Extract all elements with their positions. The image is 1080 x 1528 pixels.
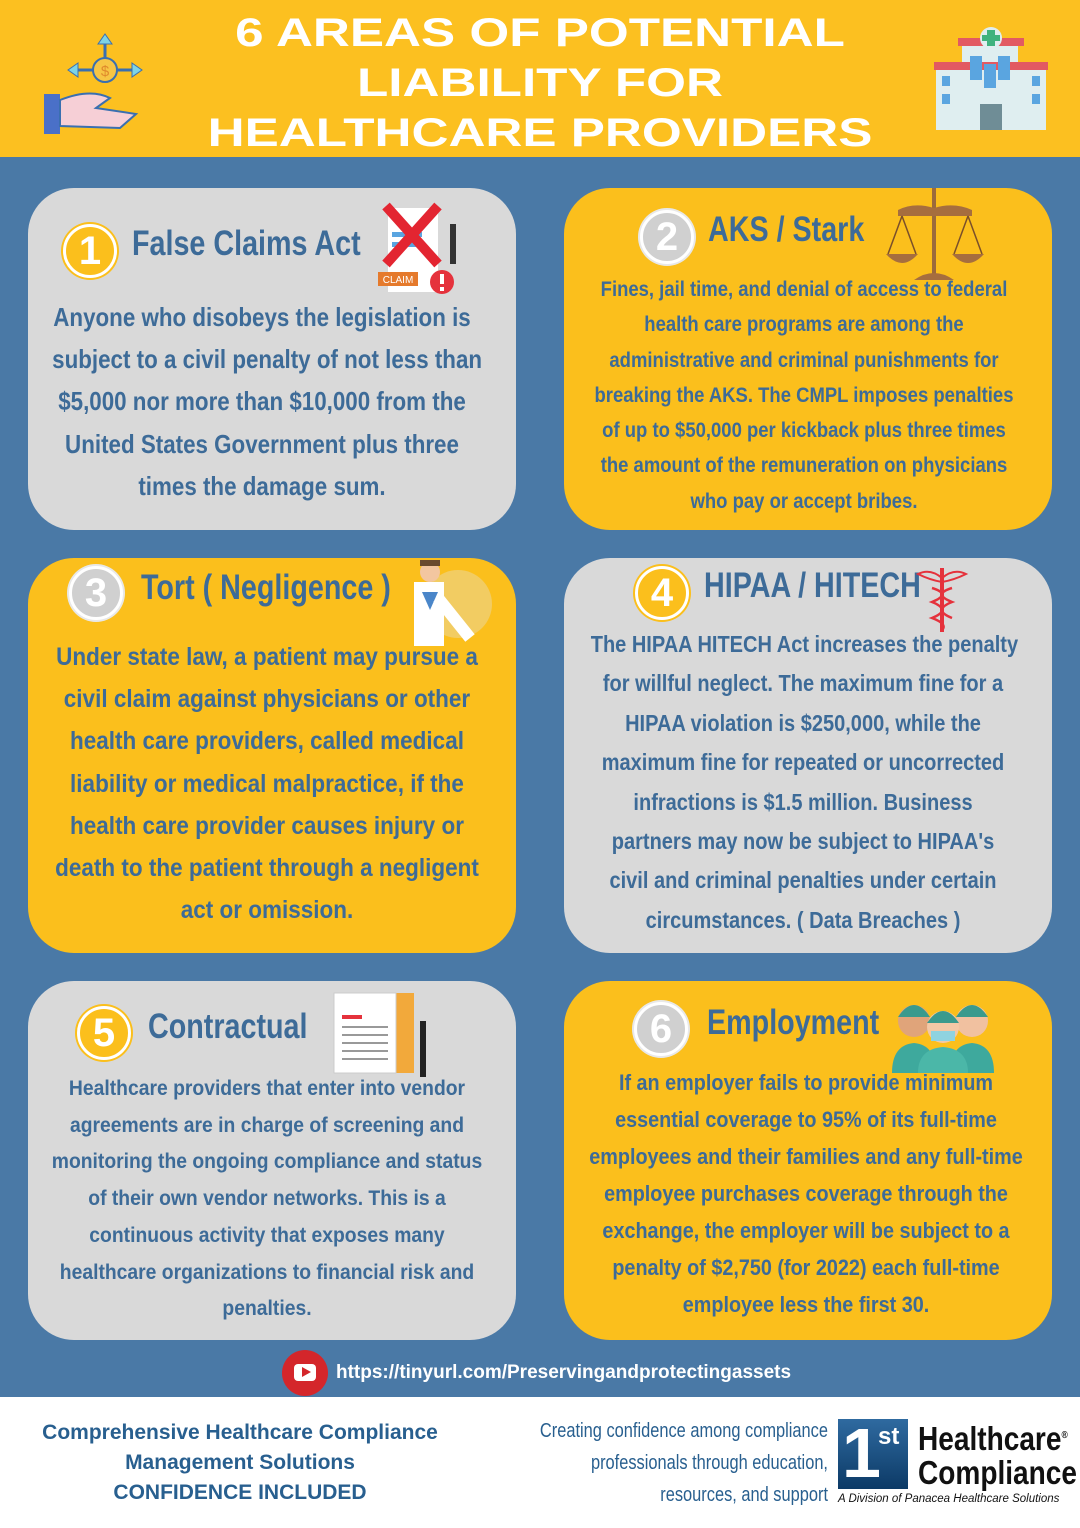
body text 3: death to the patient through a negligent — [55, 854, 479, 882]
body text 6: essential coverage to 95% of its full-time — [615, 1107, 997, 1132]
body text 4: The HIPAA HITECH Act increases the penalty — [591, 631, 1018, 657]
title: HEALTHCARE PROVIDERS — [208, 111, 872, 155]
body text 5: Healthcare providers that enter into vendor — [69, 1077, 465, 1100]
body text 2: Fines, jail time, and denial of access to federal — [601, 278, 1007, 301]
footer tagline — [540, 1420, 828, 1506]
heading 5: Contractual — [148, 1007, 307, 1046]
body text 3: civil claim against physicians or other — [64, 685, 470, 713]
title — [208, 11, 872, 155]
heading 6: Employment — [707, 1003, 879, 1042]
body text 6 — [589, 1070, 1023, 1317]
icon: hand with dollar: $ — [101, 63, 110, 80]
number badge 6 — [634, 1002, 688, 1056]
number badge 4: 4 — [651, 570, 673, 614]
number badge 4 — [635, 566, 689, 620]
icon: medical team — [892, 1005, 994, 1073]
body text 3: liability or medical malpractice, if the — [70, 770, 464, 798]
body text 6: exchange, the employer will be subject to a — [602, 1218, 1010, 1243]
body text 3 — [55, 643, 479, 924]
icon: doctor — [414, 560, 492, 646]
body text 1: times the damage sum. — [138, 471, 386, 501]
heading 1: False Claims Act — [132, 224, 361, 263]
panel: 3 Tort (Negligence) — [28, 558, 516, 953]
header band — [0, 0, 1080, 157]
body text 2: administrative and criminal punishments for — [609, 349, 999, 372]
logo: 1st Healthcare Compliance: st — [878, 1423, 899, 1450]
icon: hospital — [934, 27, 1048, 130]
footer tagline: professionals through education, — [591, 1452, 828, 1474]
body text 4: for willful neglect. The maximum fine for a — [603, 670, 1003, 696]
heading 2: AKS / Stark — [708, 210, 864, 249]
icon: document — [334, 992, 426, 1077]
logo: 1st Healthcare Compliance: Compliance — [918, 1454, 1077, 1491]
footer tagline: Creating confidence among compliance — [540, 1420, 828, 1442]
footer left text: CONFIDENCE INCLUDED — [113, 1481, 367, 1504]
body text 3: health care provider causes injury or — [70, 812, 464, 840]
link row with youtube icon — [282, 1350, 791, 1396]
number badge 5 — [77, 1006, 131, 1060]
body text 6: penalty of $2,750 (for 2022) each full-time — [612, 1255, 1000, 1280]
panel: 1 False Claims Act — [28, 188, 516, 530]
panel: 4 HIPAA / HITECH — [564, 558, 1052, 953]
body text 5: healthcare organizations to financial risk and — [60, 1261, 474, 1284]
body text 2: the amount of the remuneration on physicians — [601, 454, 1007, 477]
title: LIABILITY FOR — [357, 61, 723, 105]
icon: hand with dollar — [44, 33, 143, 134]
body text 4 — [590, 631, 1018, 933]
body text 2: of up to $50,000 per kickback plus three times — [602, 419, 1006, 442]
body text 5: agreements are in charge of screening and — [70, 1114, 464, 1137]
body text 4: maximum fine for repeated or uncorrected — [602, 749, 1004, 775]
body text 6: employee less the first 30. — [683, 1292, 929, 1317]
body text 1 — [52, 302, 482, 501]
number badge 6: 6 — [650, 1006, 672, 1050]
logo: 1st Healthcare Compliance — [838, 1414, 1077, 1505]
number badge 2: 2 — [656, 214, 678, 258]
body text 2: health care programs are among the — [644, 313, 964, 336]
body text 3: act or omission. — [181, 896, 353, 924]
body text 5: continuous activity that exposes many — [89, 1224, 445, 1247]
body text 4: infractions is $1.5 million. Business — [633, 789, 973, 815]
footer tagline: resources, and support — [660, 1484, 828, 1506]
number badge 3: 3 — [85, 570, 107, 614]
icon: claim form with X: CLAIM — [383, 275, 413, 286]
logo: 1st Healthcare Compliance: A Division of Panacea Healthcare Solutions — [838, 1493, 1059, 1505]
body text 1: United States Government plus three — [65, 429, 459, 459]
body text 2: breaking the AKS. The CMPL imposes penalties — [595, 384, 1013, 407]
icon: youtube — [282, 1350, 328, 1396]
link text: https://tinyurl.com/Preservingandprotectingassets — [336, 1362, 791, 1383]
number badge 1: 1 — [79, 228, 101, 272]
body text 5: of their own vendor networks. This is a — [88, 1187, 446, 1210]
body text 1: subject to a civil penalty of not less than — [52, 344, 482, 374]
body text 1: $5,000 nor more than $10,000 from the — [58, 386, 466, 416]
body text 4: circumstances. ( Data Breaches ) — [646, 907, 960, 933]
logo: 1st Healthcare Compliance: 1 — [842, 1414, 881, 1492]
body text 3: Under state law, a patient may pursue a — [56, 643, 478, 671]
footer — [0, 1397, 1080, 1528]
body text 5: monitoring the ongoing compliance and status — [52, 1150, 482, 1173]
heading 3: Tort ( Negligence ) — [141, 568, 391, 607]
footer left text: Management Solutions — [125, 1451, 355, 1474]
footer left text: Comprehensive Healthcare Compliance — [42, 1421, 438, 1444]
body text 4: HIPAA violation is $250,000, while the — [625, 710, 981, 736]
number badge 5: 5 — [93, 1010, 115, 1054]
body text 5 — [52, 1077, 482, 1320]
body text 4: partners may now be subject to HIPAA's — [612, 828, 994, 854]
body text 2: who pay or accept bribes. — [691, 490, 917, 513]
icon: caduceus — [916, 568, 968, 632]
body text 3: health care providers, called medical — [70, 727, 464, 755]
body text 6: If an employer fails to provide minimum — [619, 1070, 993, 1095]
number badge 2 — [640, 210, 694, 264]
body text 4: civil and criminal penalties under certain — [609, 867, 996, 893]
panel: 5 Contractual — [28, 981, 516, 1340]
icon: scales — [886, 188, 984, 280]
panel: 6 Employment — [564, 981, 1052, 1340]
body text 2 — [595, 278, 1013, 513]
title: 6 AREAS OF POTENTIAL — [235, 11, 845, 55]
panel: 2 AKS / Stark — [564, 188, 1052, 530]
number badge 3 — [69, 566, 123, 620]
body text 1: Anyone who disobeys the legislation is — [53, 302, 471, 332]
icon: claim form with X — [378, 202, 456, 294]
logo: 1st Healthcare Compliance: Healthcare® — [918, 1420, 1068, 1457]
body text 6: employees and their families and any full-time — [589, 1144, 1023, 1169]
footer left text — [42, 1421, 438, 1504]
heading 4: HIPAA / HITECH — [704, 566, 921, 605]
body text 5: penalties. — [222, 1297, 312, 1320]
number badge 1 — [63, 224, 117, 278]
body text 6: employee purchases coverage through the — [604, 1181, 1008, 1206]
